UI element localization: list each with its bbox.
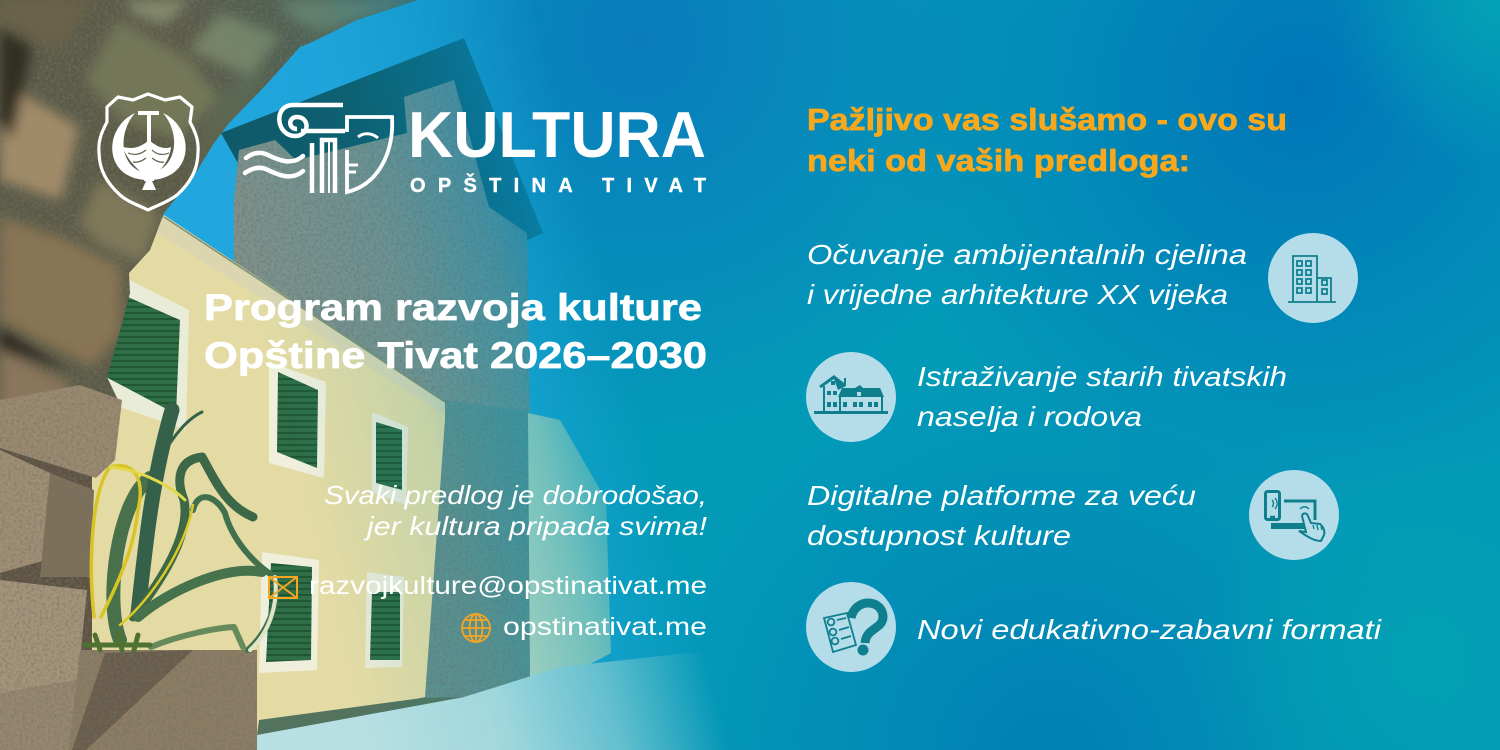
heading: suggestions: [807, 102, 1287, 178]
theatre mask: [347, 117, 392, 192]
heading: suggestions: neki od vaših predloga:: [807, 143, 1190, 178]
website contact: opstinativat.me: [503, 613, 707, 641]
windows: [108, 280, 189, 430]
title: Program razvoja kulture: [204, 287, 702, 328]
waves: [245, 153, 303, 176]
capital base: [301, 129, 345, 133]
coat of arms shield: [99, 94, 198, 210]
heading: suggestions: Pažljivo vas slušamo - ovo su: [807, 102, 1287, 137]
ground: [257, 653, 720, 750]
suggestion 1 text: i vrijedne arhitekture XX vijeka: [807, 279, 1228, 310]
suggestion 4 text: Novi edukativno-zabavni formati: [917, 614, 1382, 645]
icon: quiz and question mark: [806, 582, 896, 672]
email contact: razvojkulture@opstinativat.me: [309, 572, 707, 600]
photo: street with stone arch, tower and agave: [0, 0, 780, 750]
suggestion 1 text: [807, 239, 1247, 310]
icon: globe: [462, 614, 490, 642]
logo subline: OPŠTINA TIVAT: OPŠTINA TIVAT: [410, 173, 706, 197]
suggestion 2 text: Istraživanje starih tivatskih: [917, 361, 1287, 392]
welcome message: Svaki predlog je dobrodošao,: [324, 480, 707, 510]
icon: envelope: [269, 577, 297, 598]
stone arch: [0, 0, 418, 400]
suggestion 3 text: Digitalne platforme za veću: [807, 480, 1196, 511]
logo: column, waves and mask: [245, 105, 392, 193]
icon: phone and tablet touch: [1249, 470, 1339, 560]
suggestion 3 text: [807, 480, 1196, 551]
suggestion 2 text: [917, 361, 1287, 432]
logo wordmark: KULTURA: KULTURA: [408, 98, 706, 171]
title: [204, 287, 707, 376]
welcome message: jer kultura pripada svima!: [363, 511, 707, 541]
website contact: [462, 613, 707, 642]
far building: [528, 413, 611, 680]
suggestion 1 text: Očuvanje ambijentalnih cjelina: [807, 239, 1247, 270]
title: Opštine Tivat 2026–2030: [204, 335, 707, 376]
yellow building: [92, 218, 445, 734]
welcome message: [324, 480, 707, 541]
column shafts: [312, 140, 335, 193]
suggestion 2 text: naselja i rodova: [917, 401, 1142, 432]
agave plant: [85, 410, 276, 650]
ionic capital scroll: [279, 105, 343, 136]
icon: buildings: [1268, 233, 1358, 323]
lower stones: [0, 385, 257, 750]
suggestion 3 text: dostupnost kulture: [807, 520, 1071, 551]
icon: old houses: [806, 352, 896, 442]
tower: [221, 38, 560, 715]
